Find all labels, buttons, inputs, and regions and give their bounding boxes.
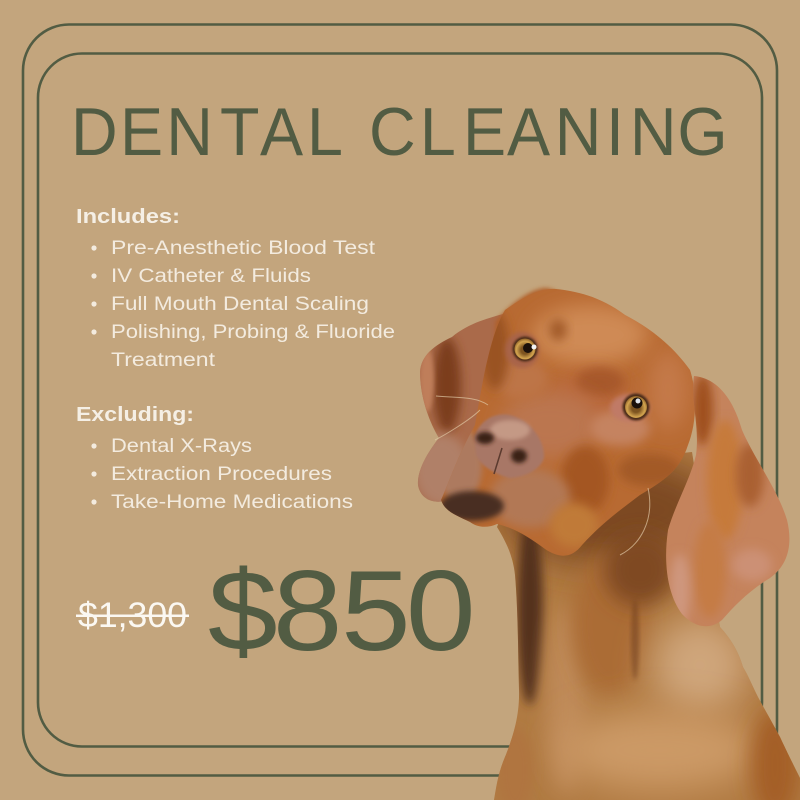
title: DENTAL CLEANING <box>71 95 728 170</box>
excluding list: Extraction Procedures <box>111 464 332 485</box>
includes section <box>76 206 395 371</box>
includes heading: Includes: <box>76 206 180 228</box>
dog head <box>441 288 695 556</box>
includes list: Full Mouth Dental Scaling <box>111 294 369 315</box>
dog photo illustration <box>410 280 800 800</box>
near ear <box>666 376 790 626</box>
excluding heading: Excluding: <box>76 404 194 426</box>
dog left eye <box>505 332 539 368</box>
inner rounded frame <box>38 54 762 746</box>
far ear top fold <box>495 288 563 345</box>
includes list: Treatment <box>111 350 216 371</box>
includes list: IV Catheter & Fluids <box>111 266 311 287</box>
old price struck through: $1,300 <box>78 596 187 635</box>
excluding list: Take-Home Medications <box>111 492 353 513</box>
far ear <box>418 314 502 502</box>
includes list: Pre-Anesthetic Blood Test <box>111 238 376 259</box>
excluding list <box>91 436 353 513</box>
excluding section <box>76 404 353 513</box>
dog neck and chest <box>494 452 800 800</box>
includes list: Polishing, Probing & Fluoride <box>111 322 395 343</box>
excluding list: Dental X-Rays <box>111 436 252 457</box>
sale price: $850 <box>208 548 476 675</box>
dog right eye <box>610 394 650 422</box>
dog whiskers <box>435 396 650 555</box>
includes list <box>91 238 395 371</box>
dog nose <box>474 414 544 478</box>
